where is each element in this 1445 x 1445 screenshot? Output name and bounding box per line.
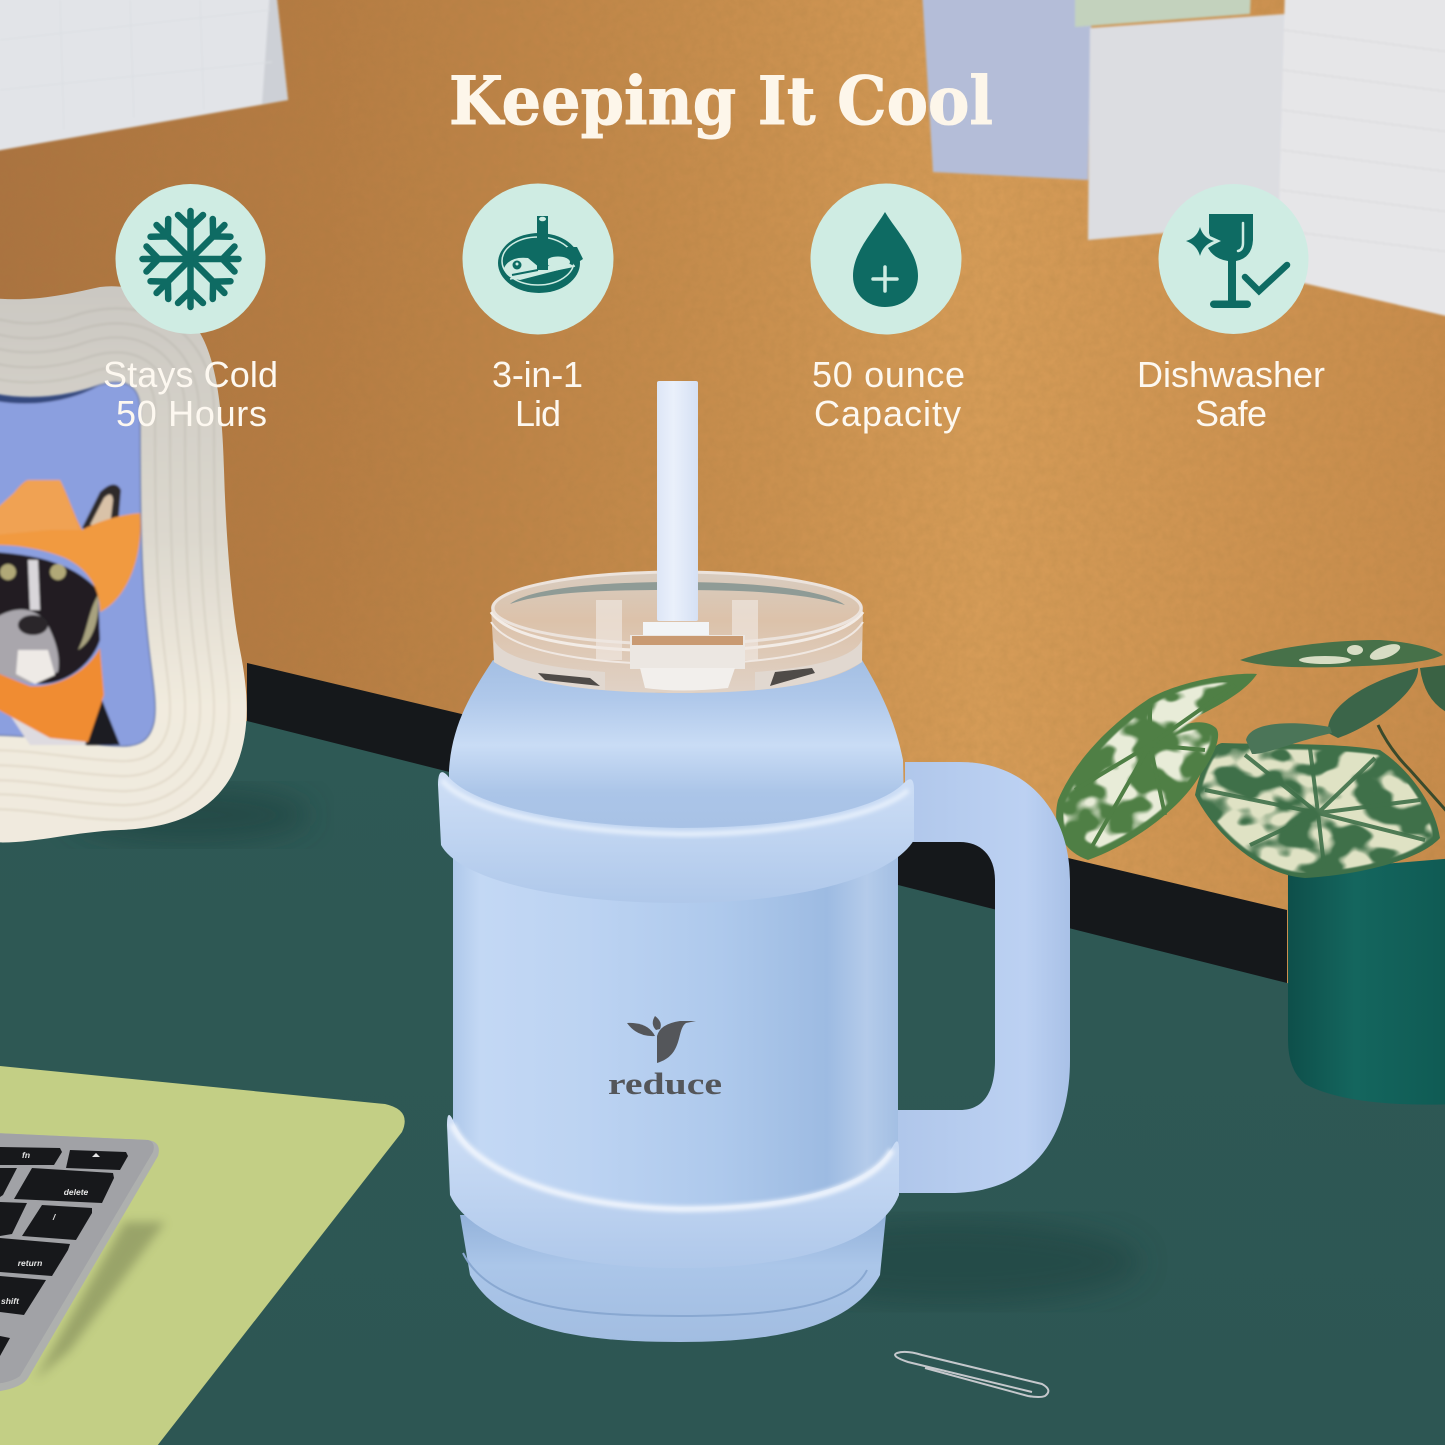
- top band: [438, 772, 914, 903]
- label: dishwasher: Safe: [1195, 393, 1267, 434]
- leaf: right edge: [1420, 664, 1445, 716]
- feature: dishwasher: [1137, 184, 1325, 434]
- label: stays cold: Stays Cold: [103, 354, 278, 395]
- mug body: [453, 850, 898, 1225]
- logo: [608, 1016, 722, 1101]
- feature: capacity: [810, 184, 965, 434]
- label: lid: Lid: [515, 393, 561, 434]
- desk mat: [0, 1065, 405, 1445]
- cowboy hat: [0, 480, 141, 612]
- label: capacity: [812, 354, 965, 434]
- mug base: [460, 1215, 886, 1342]
- feature: stays cold: [103, 184, 278, 434]
- icon: glass: [1186, 214, 1287, 308]
- mug shoulder: [449, 660, 905, 850]
- leaf: dark middle: [1328, 668, 1418, 738]
- lid: [491, 572, 863, 693]
- keyboard: [0, 1133, 159, 1392]
- papers pinned top right: [922, 0, 1445, 318]
- plant pot: [1288, 858, 1445, 1105]
- icon: snowflake: [142, 211, 238, 307]
- desk: [0, 721, 1445, 1445]
- papers pinned top left: [0, 0, 288, 152]
- key labels: delete: [64, 1187, 89, 1197]
- leaf: large center: [1195, 743, 1440, 878]
- label: stays cold: 50 Hours: [116, 393, 267, 434]
- mug handle: [890, 762, 1070, 1193]
- dog face: [0, 552, 100, 684]
- bandana: [0, 648, 104, 742]
- title: Keeping It Cool: [449, 62, 993, 140]
- plant leaves: [1056, 640, 1445, 878]
- black baseboard: [247, 663, 1287, 990]
- plant stem: [1378, 725, 1445, 815]
- feature: lid: [462, 184, 614, 434]
- key labels: return: [18, 1258, 42, 1268]
- straw: [657, 381, 698, 621]
- mug: [438, 381, 1070, 1342]
- label: dishwasher: Dishwasher: [1137, 354, 1325, 395]
- ear: [82, 484, 121, 535]
- key labels: /: [52, 1212, 57, 1222]
- leaf: top long: [1240, 640, 1443, 667]
- icon: drop: [853, 212, 918, 307]
- keyboard shadow: [35, 1222, 165, 1380]
- icon: lid: [498, 216, 583, 293]
- black chest: [85, 690, 120, 745]
- logo: reduce: [608, 1066, 722, 1101]
- leaf: arrowhead left: [1056, 674, 1257, 860]
- label: dishwasher: [1137, 354, 1325, 434]
- label: lid: [492, 354, 583, 434]
- label: stays cold: [103, 354, 278, 434]
- frame shadow: [70, 787, 310, 843]
- label: capacity: 50 ounce: [812, 354, 965, 395]
- key labels: [1, 1150, 100, 1306]
- cork wall: [0, 0, 1445, 1040]
- picture frame with dog: [0, 280, 260, 850]
- leaf: small back: [1246, 723, 1332, 754]
- label: capacity: Capacity: [814, 393, 961, 434]
- photo: dog portrait: [0, 382, 155, 746]
- key labels: shift: [1, 1296, 20, 1306]
- bottom band: [447, 1115, 899, 1268]
- mug shadow: [760, 1220, 1140, 1304]
- label: lid: 3-in-1: [492, 354, 583, 395]
- key labels: fn: [22, 1150, 30, 1160]
- paperclip: [895, 1352, 1048, 1397]
- frame ridges: [0, 280, 260, 850]
